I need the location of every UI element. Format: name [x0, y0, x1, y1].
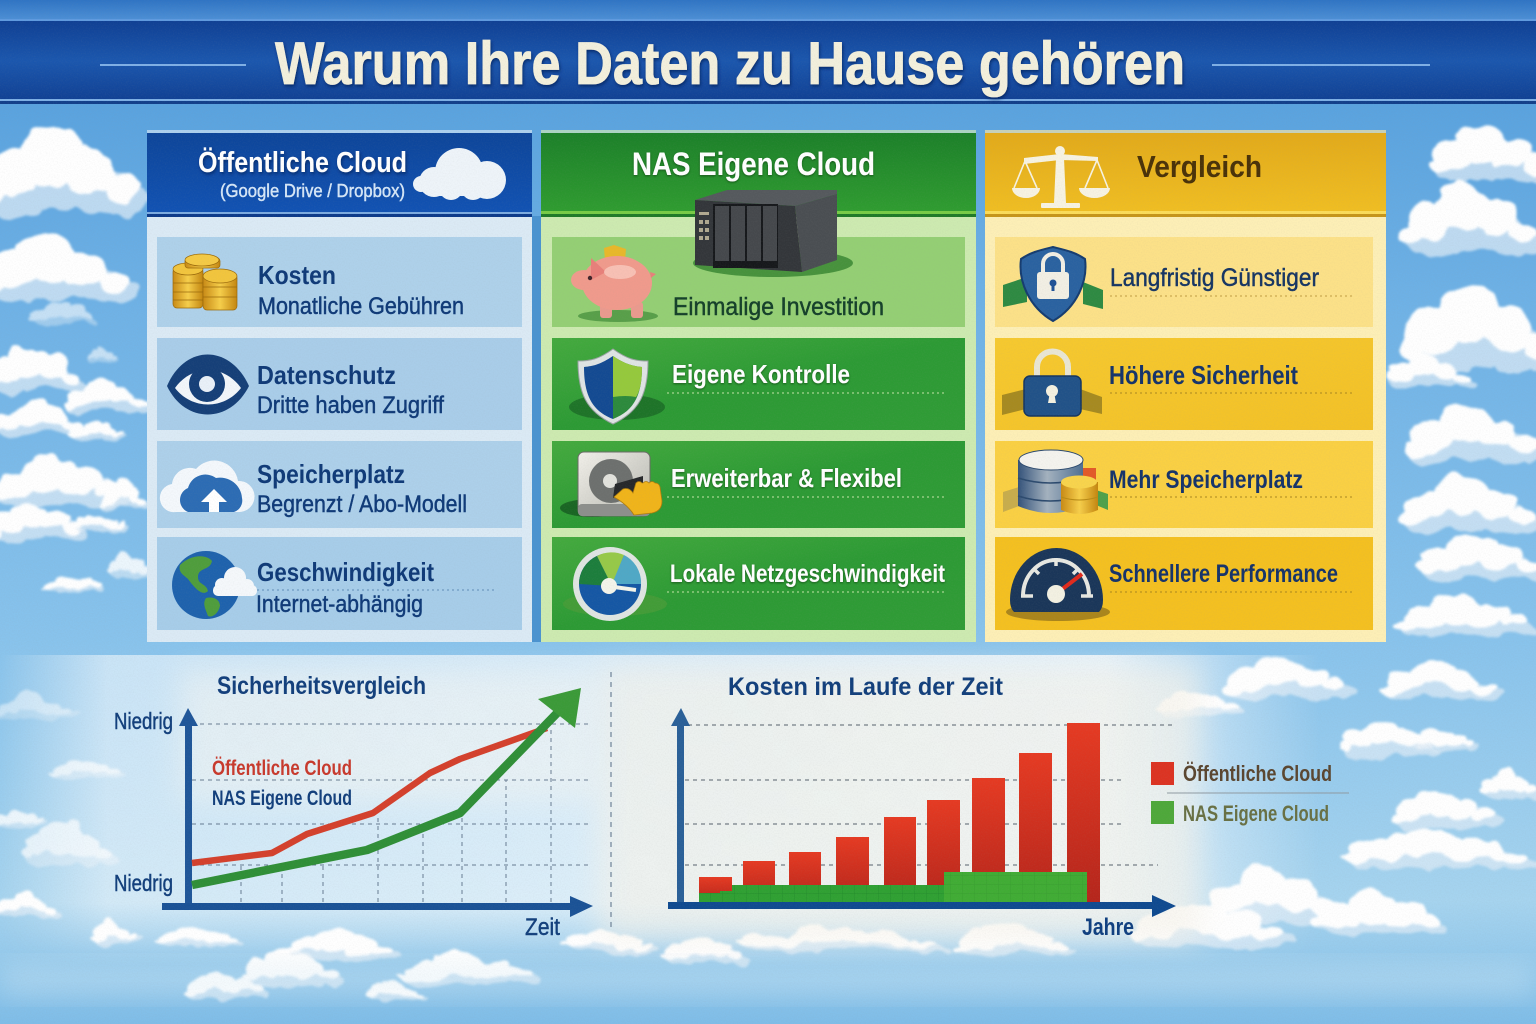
- icon: hard drive with hand: [560, 452, 662, 517]
- chart title: Sicherheitsvergleich: [217, 672, 426, 700]
- heading: public cloud: Öffentliche Cloud: [198, 146, 407, 179]
- row: Eigene Kontrolle: [552, 338, 965, 430]
- text: Langfristig Günstiger: Langfristig Günstiger: [1110, 264, 1319, 292]
- row: Erweiterbar & Flexibel: [552, 441, 965, 528]
- green stepped area: [699, 872, 1087, 902]
- text: Mehr Speicherplatz: Mehr Speicherplatz: [1109, 466, 1303, 494]
- icon: globe: [172, 551, 257, 619]
- text: Monatliche Gebühren: Monatliche Gebühren: [258, 293, 464, 320]
- row: Höhere Sicherheit: [995, 338, 1373, 430]
- y axis arrow: [671, 708, 690, 906]
- subheading: (Google Drive / Dropbox): [220, 181, 405, 201]
- chart title: Kosten im Laufe der Zeit: [728, 673, 1004, 701]
- label: Kosten: Kosten: [258, 260, 336, 290]
- title banner: [0, 19, 1536, 104]
- clouds: bottom: [0, 659, 1536, 1001]
- top strip: [0, 0, 1536, 20]
- panel: NAS own cloud: [541, 130, 976, 642]
- panel: comparison: [985, 130, 1386, 642]
- clouds: right side: [1387, 124, 1536, 637]
- legend: [1151, 761, 1349, 826]
- icon: gauge globe: [563, 547, 667, 621]
- row: Lokale Netzgeschwindigkeit: [552, 537, 965, 630]
- icon: NAS device: [693, 190, 853, 277]
- label: Geschwindigkeit: Geschwindigkeit: [257, 557, 434, 587]
- icon: scales: [1012, 146, 1110, 208]
- heading: Vergleich: Vergleich: [1137, 149, 1262, 184]
- row: Langfristig Günstiger: [995, 237, 1373, 327]
- text: Höhere Sicherheit: Höhere Sicherheit: [1109, 360, 1298, 390]
- text: Dritte haben Zugriff: Dritte haben Zugriff: [257, 392, 444, 419]
- legend label: public: Öffentliche Cloud: [1183, 761, 1332, 786]
- text: Schnellere Performance: Schnellere Performance: [1109, 560, 1338, 588]
- icon: piggy bank: [571, 245, 658, 322]
- title: Warum Ihre Daten zu Hause gehören: [275, 30, 1185, 97]
- heading: NAS: NAS Eigene Cloud: [632, 146, 875, 182]
- label: Öffentliche Cloud: Öffentliche Cloud: [212, 757, 352, 780]
- panel: public cloud: [147, 130, 541, 642]
- chart area backdrop: [0, 655, 1536, 995]
- text: Einmalige Investition: Einmalige Investition: [673, 293, 884, 321]
- row: Geschwindigkeit: [157, 537, 522, 630]
- icon: cloud: [413, 148, 506, 200]
- x axis label: Zeit: [525, 914, 560, 941]
- clouds: left side: [0, 124, 151, 593]
- icon: database with coins: [1003, 450, 1108, 514]
- icon: speedometer: [1006, 548, 1110, 621]
- y axis label bottom: Niedrig: [114, 870, 173, 896]
- row: Schnellere Performance: [995, 537, 1373, 630]
- row: Mehr Speicherplatz: [995, 441, 1373, 528]
- red bars: [699, 723, 1100, 902]
- label: Speicherplatz: Speicherplatz: [257, 459, 405, 489]
- icon: eye: [167, 354, 249, 414]
- row: Kosten: [157, 237, 522, 327]
- y axis label top: Niedrig: [114, 708, 173, 734]
- legend label: NAS: NAS Eigene Cloud: [1183, 801, 1329, 826]
- row: Einmalige Investition: [552, 237, 965, 327]
- x axis label: Jahre: [1082, 914, 1134, 941]
- x axis arrow: [162, 896, 593, 917]
- y axis arrow: [179, 708, 198, 906]
- chart: cost over time: [668, 673, 1349, 941]
- text: Lokale Netzgeschwindigkeit: Lokale Netzgeschwindigkeit: [670, 560, 946, 588]
- icon: shield: [569, 349, 665, 424]
- red line: public cloud: [192, 728, 547, 863]
- icon: cloud upload: [160, 461, 255, 512]
- text: Internet-abhängig: Internet-abhängig: [256, 591, 423, 618]
- icon: coins: [173, 254, 237, 310]
- label: NAS Eigene Cloud: NAS Eigene Cloud: [212, 787, 352, 810]
- icon: shield with lock: [1003, 247, 1103, 321]
- text: Eigene Kontrolle: Eigene Kontrolle: [672, 359, 850, 389]
- text: Begrenzt / Abo-Modell: Begrenzt / Abo-Modell: [257, 491, 467, 518]
- row: Speicherplatz: [157, 441, 522, 528]
- row: Datenschutz: [157, 338, 522, 430]
- label: Datenschutz: Datenschutz: [257, 360, 396, 390]
- x axis arrow: [668, 895, 1176, 917]
- text: Erweiterbar & Flexibel: Erweiterbar & Flexibel: [671, 463, 902, 493]
- green arrow: NAS: [192, 688, 581, 885]
- icon: padlock: [1002, 351, 1102, 416]
- chart: security comparison: [114, 672, 593, 941]
